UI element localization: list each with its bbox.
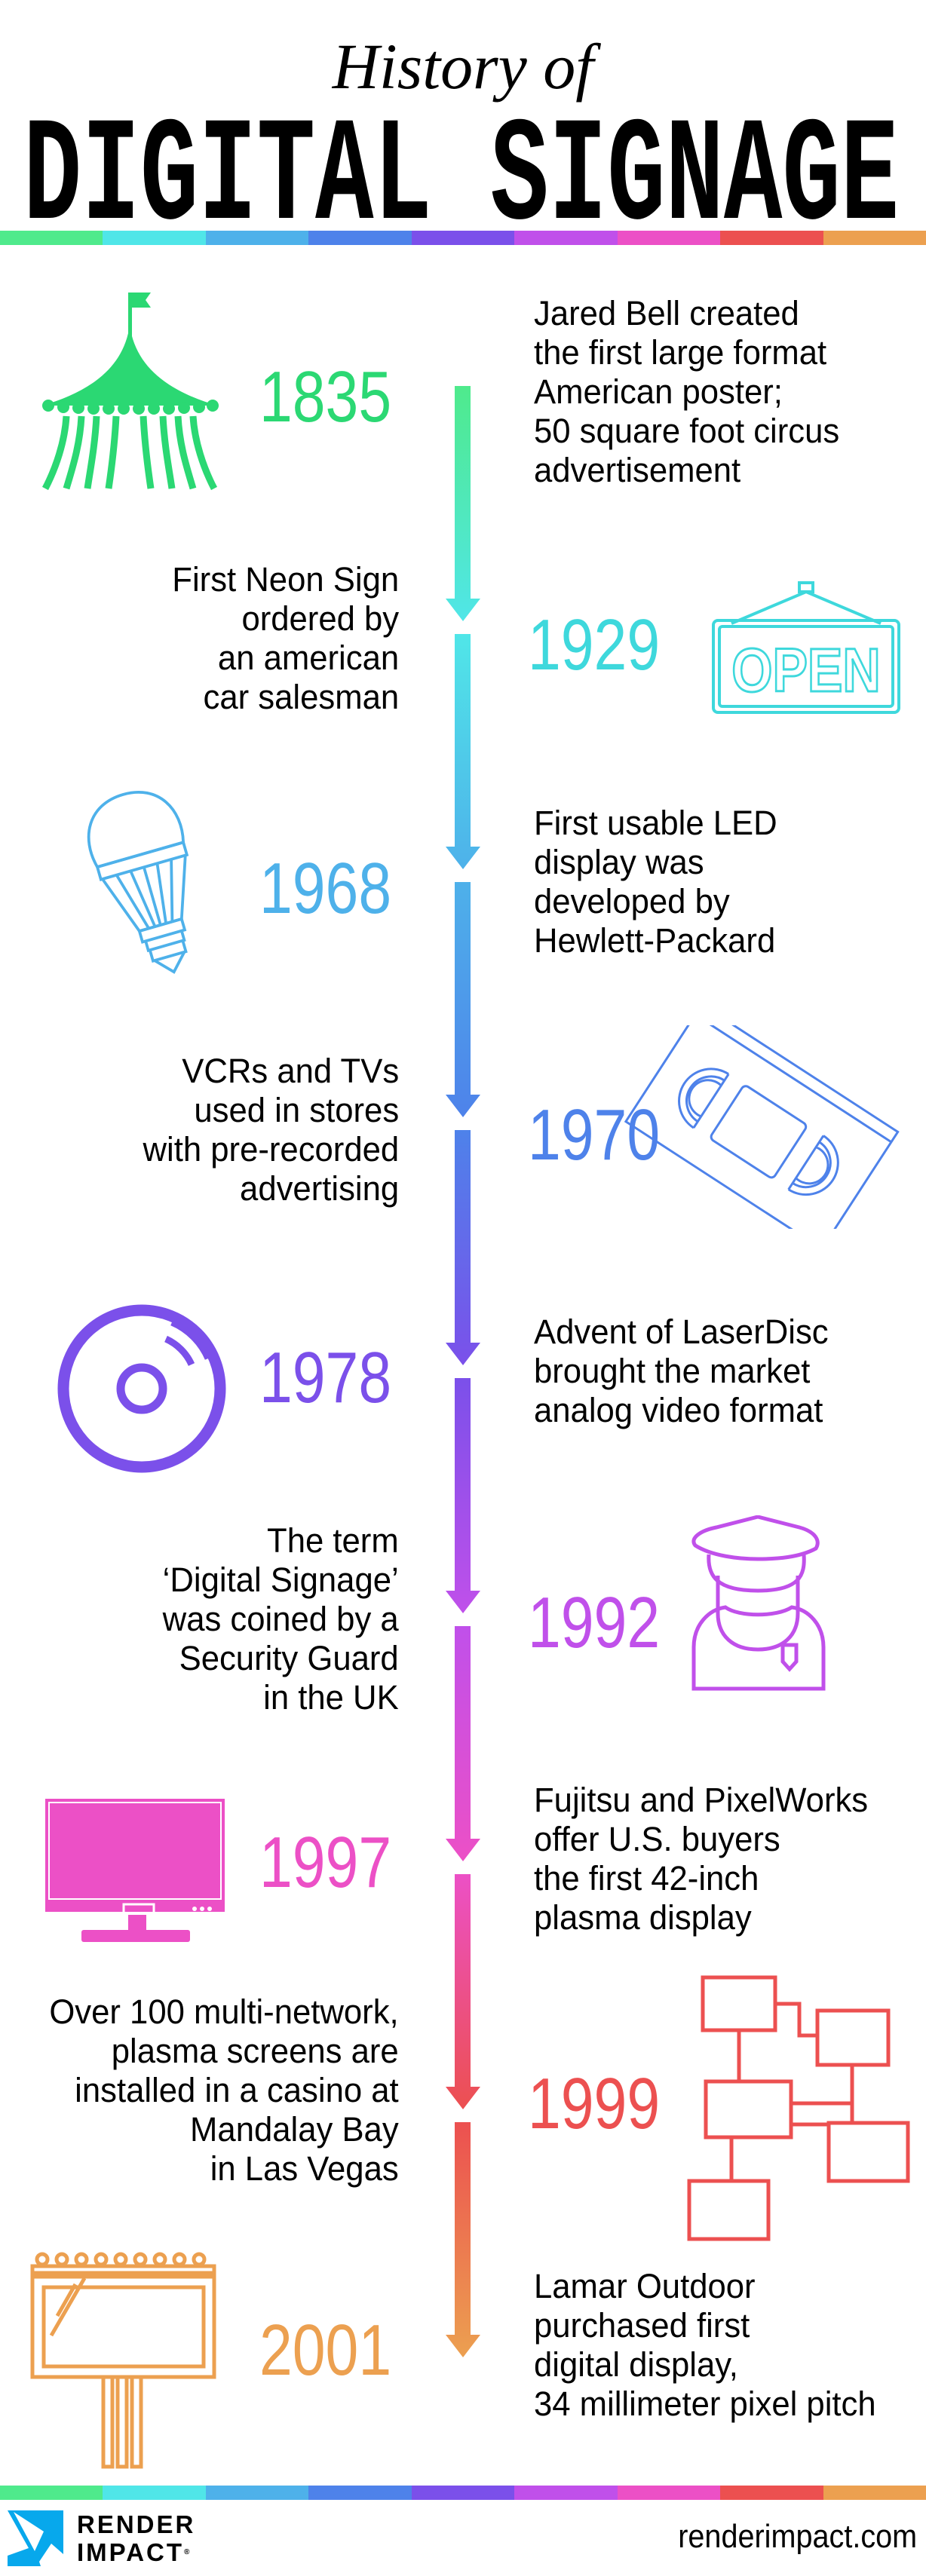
text 1997 — [534, 1781, 868, 1937]
year 1978: 1978 — [259, 1337, 391, 1418]
arrow 5 — [446, 1378, 480, 1613]
text 2001: Lamar Outdoor — [534, 2267, 756, 2305]
text 2001: 34 millimeter pixel pitch — [534, 2385, 876, 2423]
color bar top — [0, 231, 926, 245]
year 1929: 1929 — [528, 605, 660, 685]
text 1970: with pre-recorded — [143, 1130, 399, 1169]
arrow 7 — [446, 1874, 480, 2109]
text 2001: purchased first — [534, 2306, 750, 2345]
text 1835: Jared Bell created — [534, 294, 799, 332]
text 1929: an american — [218, 639, 399, 677]
text 1997: the first 42-inch — [534, 1859, 759, 1898]
text 1968: Hewlett-Packard — [534, 921, 775, 960]
arrow 4 — [446, 1130, 480, 1365]
text 1929: car salesman — [203, 678, 399, 716]
icon: OPEN sign — [712, 581, 900, 714]
footer url: renderimpact.com — [678, 2518, 917, 2555]
logo: Render Impact — [8, 2510, 195, 2566]
text 1992: Security Guard — [179, 1639, 399, 1677]
year 1997: 1997 — [259, 1822, 391, 1903]
year 1835: 1835 — [259, 357, 391, 437]
year 2001: 2001 — [259, 2310, 391, 2391]
year 1968: 1968 — [259, 848, 391, 929]
arrow 1 — [446, 386, 480, 621]
text 1835: 50 square foot circus — [534, 412, 839, 450]
logo text: IMPACT® — [77, 2538, 189, 2566]
arrow 6 — [446, 1626, 480, 1861]
arrow 2 — [446, 634, 480, 869]
text 1992: was coined by a — [163, 1600, 399, 1638]
text 1968 — [534, 804, 777, 960]
icon: logo mark — [8, 2510, 63, 2566]
text 1997: offer U.S. buyers — [534, 1820, 780, 1858]
text 1978: Advent of LaserDisc — [534, 1313, 829, 1351]
logo text: RENDER — [77, 2510, 195, 2538]
text 1992: The term — [267, 1521, 399, 1560]
text 1970 — [143, 1052, 399, 1208]
text 1992: in the UK — [263, 1678, 399, 1717]
text 2001 — [534, 2267, 876, 2423]
text 1835 — [534, 294, 839, 489]
text 1992 — [163, 1521, 399, 1717]
text 1835: advertisement — [534, 451, 740, 489]
icon: VHS tape — [624, 1025, 900, 1229]
text 1997: plasma display — [534, 1898, 752, 1937]
year 1992: 1992 — [528, 1582, 660, 1663]
text 1929: First Neon Sign — [172, 560, 399, 599]
icon: light bulb — [87, 791, 189, 974]
icon: security guard — [691, 1515, 825, 1690]
icon: plasma TV — [45, 1799, 225, 1942]
text 1978: analog video format — [534, 1391, 823, 1429]
icon: billboard — [30, 2253, 216, 2468]
arrow 8 — [446, 2122, 480, 2357]
icon: laserdisc — [57, 1304, 226, 1473]
icon: OPEN sign: OPEN — [731, 636, 881, 705]
text 1999 — [50, 1992, 399, 2188]
year 1999: 1999 — [528, 2063, 660, 2144]
text 1992: ‘Digital Signage’ — [163, 1561, 399, 1599]
title: History of: History of — [333, 30, 593, 103]
logo text — [77, 2510, 195, 2566]
arrow 3 — [446, 882, 480, 1117]
text 1970: used in stores — [194, 1091, 399, 1129]
text 1970: VCRs and TVs — [182, 1052, 399, 1090]
color bar bottom — [0, 2486, 926, 2500]
title: DIGITAL SIGNAGE: DIGITAL SIGNAGE — [23, 95, 899, 262]
text 1835: American poster; — [534, 372, 783, 411]
text 1835: the first large format — [534, 333, 826, 372]
text 1968: First usable LED — [534, 804, 777, 842]
text 1999: Mandalay Bay — [190, 2110, 399, 2149]
text 1997: Fujitsu and PixelWorks — [534, 1781, 868, 1819]
text 1999: plasma screens are — [112, 2032, 399, 2070]
text 1929 — [172, 560, 399, 716]
text 1968: display was — [534, 843, 704, 881]
text 2001: digital display, — [534, 2345, 738, 2384]
text 1978 — [534, 1313, 829, 1429]
text 1968: developed by — [534, 882, 730, 920]
text 1978: brought the market — [534, 1352, 810, 1390]
icon: network boxes — [688, 1975, 909, 2241]
text 1999: in Las Vegas — [210, 2149, 399, 2188]
icon: circus tent — [42, 293, 219, 490]
text 1999: Over 100 multi-network, — [50, 1992, 399, 2031]
year 1970: 1970 — [528, 1095, 660, 1175]
text 1999: installed in a casino at — [75, 2071, 399, 2109]
text 1970: advertising — [240, 1169, 399, 1208]
text 1929: ordered by — [241, 599, 399, 638]
